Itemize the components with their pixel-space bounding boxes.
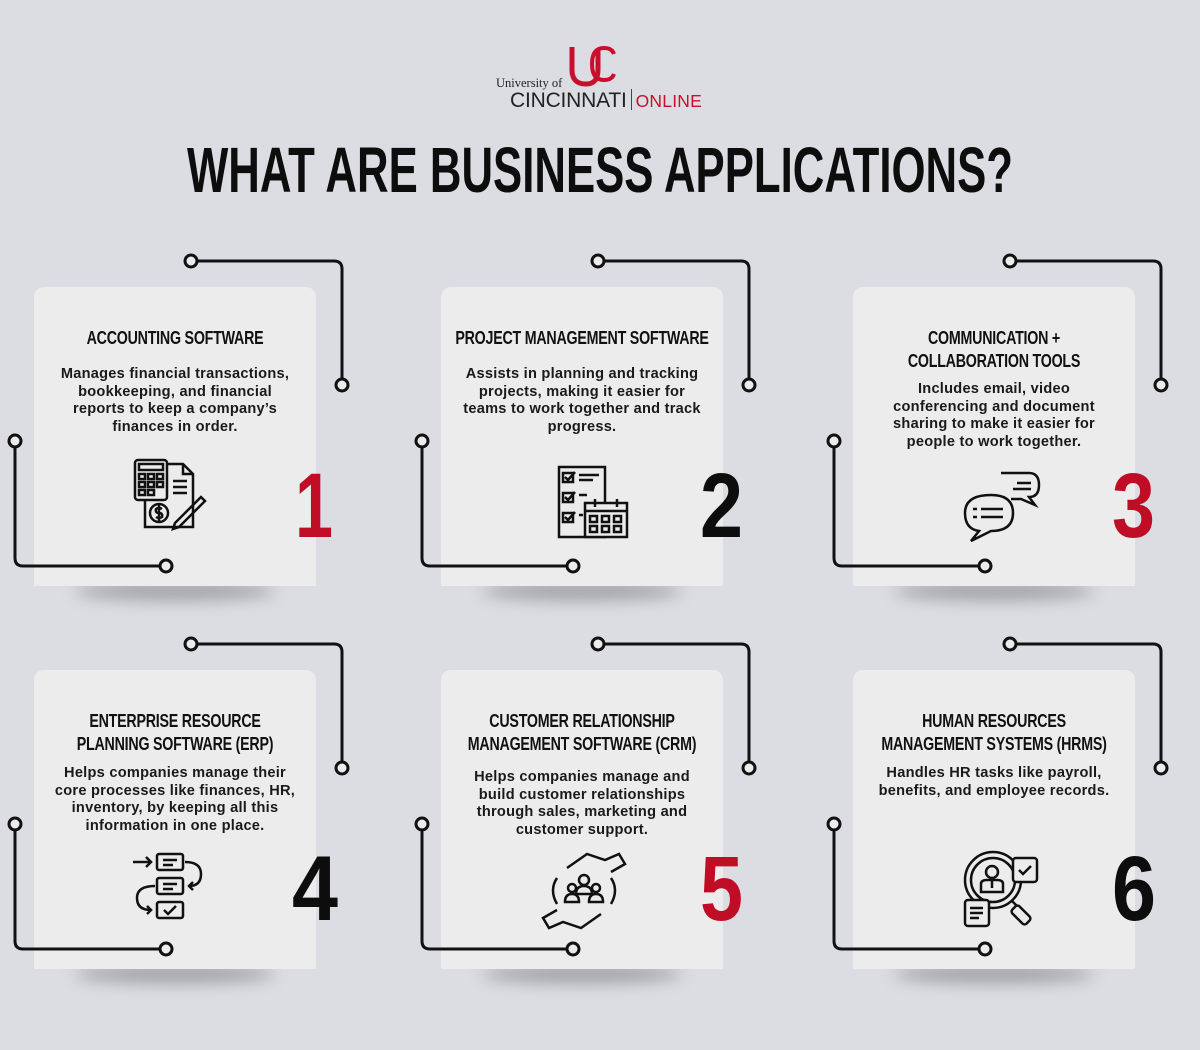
number 3: 3	[1112, 455, 1155, 557]
heading: COLLABORATION TOOLS	[908, 350, 1080, 370]
text block: Manages financial transactions,	[61, 366, 289, 382]
text block: conferencing and document	[893, 398, 1095, 414]
text block: core processes like finances, HR,	[55, 782, 295, 798]
number 1: 1	[295, 455, 333, 557]
text block: information in one place.	[86, 818, 264, 834]
text block: finances in order.	[112, 418, 238, 434]
icon: calculator invoice	[134, 458, 207, 531]
heading: PLANNING SOFTWARE (ERP)	[77, 732, 273, 754]
heading: PROJECT MANAGEMENT SOFTWARE	[455, 327, 709, 348]
heading: HUMAN RESOURCES	[922, 710, 1066, 731]
text block: inventory, by keeping all this	[72, 800, 278, 816]
heading: COMMUNICATION +	[928, 327, 1060, 348]
heading	[468, 710, 696, 754]
text block: reports to keep a company’s	[73, 401, 277, 417]
icon: hands with people	[541, 852, 627, 930]
text block: customer support.	[516, 822, 648, 838]
heading	[908, 327, 1080, 370]
text block	[61, 366, 289, 434]
number 6: 6	[1112, 838, 1156, 940]
icon: workflow	[133, 852, 202, 920]
text block: Helps companies manage and	[474, 769, 690, 785]
text block	[893, 381, 1095, 450]
number 4: 4	[292, 838, 338, 940]
heading: MANAGEMENT SOFTWARE (CRM)	[468, 732, 696, 754]
panel: communication + collaboration tools	[826, 254, 1168, 608]
text block: build customer relationships	[479, 786, 685, 802]
heading: CUSTOMER RELATIONSHIP	[489, 710, 675, 731]
text block: benefits, and employee records.	[879, 782, 1109, 798]
logo: CINCINNATI ONLINE	[510, 89, 702, 112]
heading	[77, 710, 273, 754]
logo mark UC	[570, 46, 616, 86]
text block: Assists in planning and tracking	[466, 366, 698, 382]
text block: projects, making it easier for	[479, 384, 685, 400]
connectors	[414, 254, 756, 574]
panel: CRM	[414, 636, 756, 992]
text block: Helps companies manage their	[64, 765, 286, 781]
connectors	[826, 254, 1168, 574]
icon: magnifier person	[964, 850, 1038, 928]
icon: chat bubbles	[964, 472, 1040, 542]
connectors	[414, 636, 756, 956]
number 2: 2	[700, 455, 743, 557]
logo	[496, 46, 702, 112]
connectors	[8, 254, 350, 574]
text block: Includes email, video	[918, 381, 1070, 397]
heading: MANAGEMENT SYSTEMS (HRMS)	[881, 732, 1107, 754]
logo text: University of	[496, 76, 562, 90]
icon: checklist calendar	[558, 466, 628, 538]
text block: people to work together.	[907, 434, 1081, 450]
panel: project management software	[414, 254, 756, 608]
text block	[463, 366, 701, 434]
text block: bookkeeping, and financial	[78, 384, 272, 400]
number 5: 5	[700, 838, 743, 940]
text block: progress.	[548, 418, 616, 434]
text block: Handles HR tasks like payroll,	[886, 765, 1102, 781]
text block	[474, 769, 690, 838]
panel: HRMS	[826, 636, 1168, 992]
heading	[881, 710, 1107, 754]
connectors	[8, 636, 350, 956]
heading: ACCOUNTING SOFTWARE	[87, 327, 263, 348]
heading: ENTERPRISE RESOURCE	[89, 710, 261, 731]
text block	[879, 765, 1109, 798]
text block	[55, 765, 295, 834]
panel: ERP	[8, 636, 350, 992]
text block: sharing to make it easier for	[893, 416, 1095, 432]
panel: accounting software	[8, 254, 350, 608]
text block: through sales, marketing and	[477, 804, 687, 820]
text block: teams to work together and track	[463, 401, 701, 417]
connectors	[826, 636, 1168, 956]
